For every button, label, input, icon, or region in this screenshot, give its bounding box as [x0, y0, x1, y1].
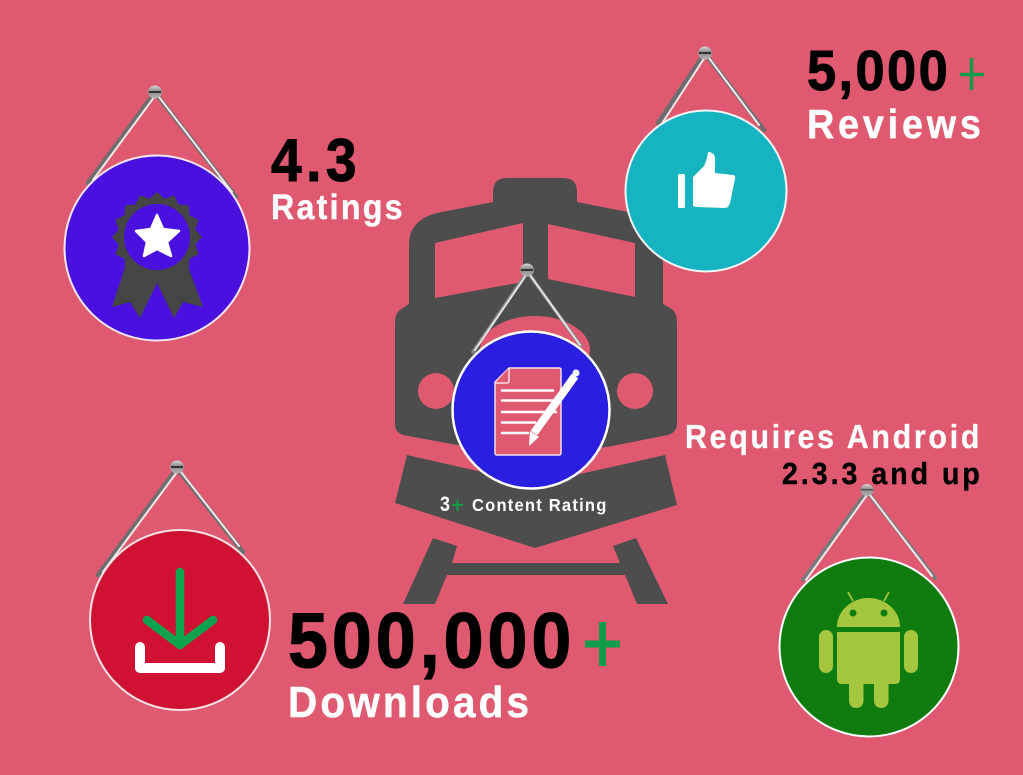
plus sign [585, 622, 620, 666]
train plow [395, 455, 677, 548]
right headlight [617, 373, 653, 409]
left headlight [418, 373, 454, 409]
hanging rope [803, 494, 935, 580]
nail [170, 460, 184, 474]
text: requires android [685, 418, 980, 491]
train illustration [395, 178, 677, 604]
version: 2.3.3 and up [782, 457, 980, 491]
badge: downloads [90, 460, 270, 710]
nail [520, 264, 534, 276]
text: 4.3 ratings [271, 128, 403, 227]
value: 5,000 [807, 38, 948, 102]
value: 500,000 [288, 596, 571, 684]
train rails [403, 538, 668, 604]
circle [90, 530, 270, 710]
label: Reviews [807, 102, 981, 147]
icon: download arrow [140, 572, 220, 668]
label: Requires Android [685, 418, 979, 455]
nail [698, 46, 712, 60]
circle [780, 558, 958, 736]
badge: ratings [64, 86, 250, 340]
circle [64, 156, 250, 340]
icon: thumbs up [678, 152, 735, 208]
circle [452, 332, 610, 488]
value: 4.3 [271, 128, 357, 195]
train body [395, 178, 677, 452]
centre arch [480, 316, 590, 384]
label: Downloads [288, 677, 529, 726]
circle [626, 110, 786, 272]
icon: document and pen [495, 368, 580, 455]
right window [548, 224, 635, 297]
hanging rope [658, 56, 764, 130]
label: Ratings [271, 189, 403, 227]
nail [148, 86, 162, 98]
text: 3+ content rating [440, 493, 606, 516]
plus sign [452, 500, 463, 511]
left window [435, 223, 523, 298]
text: 5,000+ reviews [807, 38, 984, 147]
badge: reviews [626, 46, 786, 272]
label: Content Rating [472, 494, 606, 515]
nail [860, 484, 874, 496]
badge: content rating [452, 264, 610, 488]
icon: android robot [819, 592, 918, 708]
icon: award ribbon [112, 192, 203, 318]
hanging rope [473, 274, 581, 352]
hanging rope [88, 95, 236, 197]
text: 500,000+ downloads [288, 596, 620, 726]
plus sign [960, 58, 984, 90]
badge: android [780, 484, 958, 736]
hanging rope [98, 471, 243, 575]
value: 3 [440, 493, 450, 516]
